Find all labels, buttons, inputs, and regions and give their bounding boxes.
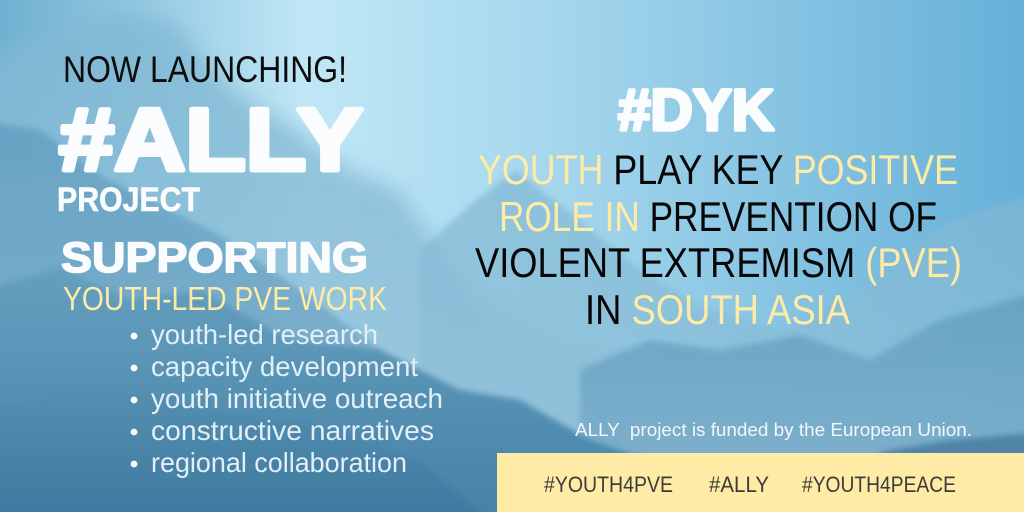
bullet: capacity development: capacity development — [151, 351, 418, 382]
heading: #ALLY: #ALLY — [59, 90, 363, 189]
bullet: youth initiative outreach: youth initiative outreach — [151, 383, 443, 414]
statement line 1: YOUTH PLAY KEY POSITIVE — [478, 146, 958, 193]
main statement — [475, 146, 962, 333]
statement line 4: IN SOUTH ASIA — [585, 286, 850, 333]
hashtag: ally: #ALLY — [709, 472, 769, 497]
hashtag banner — [497, 453, 1024, 512]
funding note: ALLY project is funded by the European Union. — [575, 420, 972, 440]
subheading: youth-led PVE work: YOUTH-LED PVE WORK — [63, 280, 387, 317]
bullet: constructive narratives: constructive narratives — [151, 415, 434, 446]
bullet: youth-led research: youth-led research — [151, 319, 378, 350]
heading: supporting: SUPPORTING — [61, 234, 368, 282]
statement line 3: VIOLENT EXTREMISM (PVE) — [475, 239, 962, 286]
hashtag: youth4peace: #YOUTH4PEACE — [802, 472, 956, 497]
statement line 2: ROLE IN PREVENTION OF — [499, 193, 937, 240]
heading: #DYK: #DYK — [618, 78, 774, 143]
bullet: regional collaboration: regional collaboration — [151, 447, 407, 478]
heading: project: PROJECT — [57, 181, 200, 219]
hashtag: youth4pve: #YOUTH4PVE — [544, 472, 673, 497]
heading: now launching: NOW LAUNCHING! — [63, 49, 347, 90]
bullet list — [131, 319, 443, 478]
